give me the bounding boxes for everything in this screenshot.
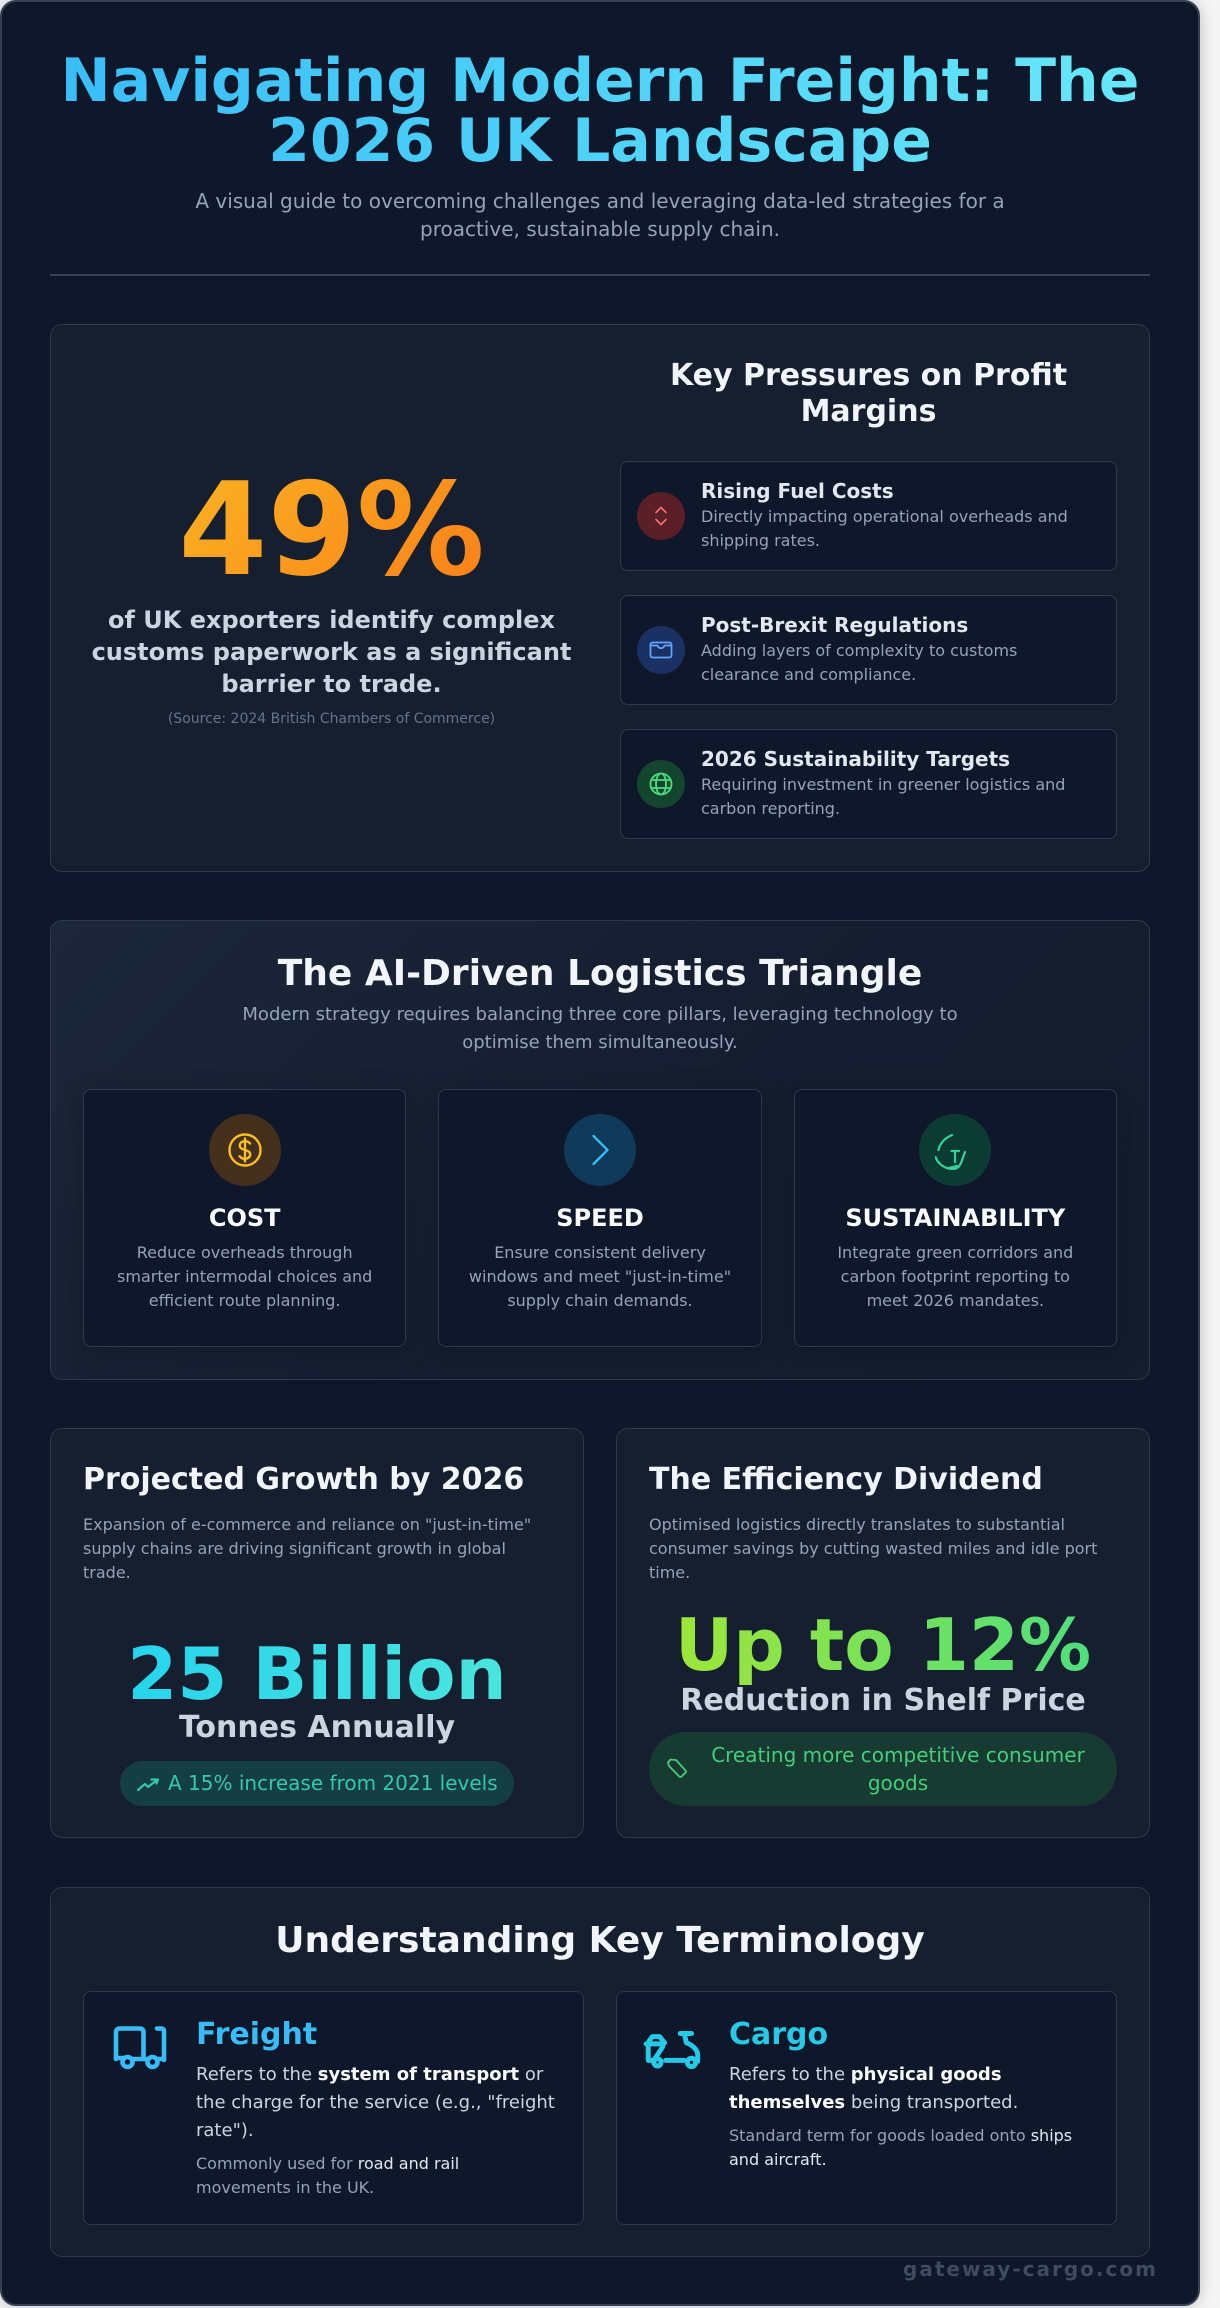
description: efficiency dividend — [649, 1515, 1097, 1582]
text: rising fuel costs — [701, 479, 1068, 550]
big statistic: up to 12%: Up to 12% — [675, 1603, 1091, 1687]
description: speed: supply chain demands. — [507, 1291, 693, 1310]
subtitle: A visual guide to overcoming challenges and leveraging data-led strategies for a — [195, 188, 1005, 212]
logistics triangle intro: Modern strategy requires balancing three core pillars, leveraging technology to — [242, 1004, 958, 1025]
pill text: Creating more competitive consumer — [711, 1742, 1085, 1766]
card: speed — [438, 1089, 762, 1347]
description: efficiency dividend: Optimised logistics directly translates to substantial — [649, 1515, 1065, 1534]
label: cost: COST — [209, 1204, 280, 1232]
statistic description: customs paperwork as a significant — [92, 638, 571, 666]
statistic source: (Source: 2024 British Chambers of Commerce) — [168, 711, 495, 727]
big statistic 49%: 49% — [178, 456, 485, 605]
subtitle — [195, 188, 1005, 240]
definition: cargo — [729, 2064, 1018, 2113]
text: sustainability targets: 2026 Sustainability Targets — [701, 747, 1010, 771]
description: efficiency dividend: consumer savings by cutting wasted miles and idle port — [649, 1539, 1097, 1558]
description: speed — [469, 1243, 731, 1310]
text: sustainability targets — [701, 747, 1065, 818]
icon: price tag — [667, 1758, 687, 1778]
description: cost: Reduce overheads through — [137, 1243, 353, 1262]
big statistic: 25 billion: 25 Billion — [127, 1632, 507, 1716]
text: sustainability targets: Requiring investment in greener logistics and — [701, 774, 1065, 794]
logistics triangle intro: optimise them simultaneously. — [462, 1032, 738, 1053]
description: projected growth: supply chains are driving significant growth in global — [83, 1539, 506, 1558]
heading: key pressures: Key Pressures on Profit — [670, 358, 1067, 392]
icon: fuel chevrons — [637, 492, 685, 540]
statistic unit: Tonnes Annually — [179, 1710, 455, 1745]
text: post-brexit regulations: Post-Brexit Regulations — [701, 613, 968, 637]
callout pill: competitive goods — [649, 1732, 1117, 1806]
definition: cargo: Refers to the physical goods — [729, 2064, 1002, 2085]
heading: logistics triangle: The AI-Driven Logistics Triangle — [278, 953, 922, 994]
label: speed: SPEED — [556, 1204, 644, 1232]
description: sustainability: Integrate green corridors and — [837, 1243, 1073, 1262]
statistic unit: Reduction in Shelf Price — [680, 1682, 1086, 1718]
title — [50, 51, 1150, 171]
text: post-brexit regulations — [701, 613, 1017, 684]
heading: projected growth: Projected Growth by 2026 — [83, 1462, 524, 1497]
description: cost: efficient route planning. — [149, 1291, 341, 1310]
description: sustainability: carbon footprint reporting to — [841, 1267, 1070, 1286]
term: freight: Freight — [196, 2016, 317, 2052]
card: rising fuel costs — [620, 461, 1117, 571]
card: cargo — [616, 1991, 1117, 2225]
description: speed: windows and meet "just-in-time" — [469, 1267, 731, 1286]
icon: dollar coin — [209, 1114, 281, 1186]
usage note: cargo — [729, 2126, 1072, 2169]
card: sustainability — [794, 1089, 1117, 1347]
text: sustainability targets: carbon reporting. — [701, 798, 840, 818]
description: projected growth: Expansion of e-commerce and reliance on "just-in-time" — [83, 1515, 531, 1534]
panel: key terminology — [50, 1887, 1150, 2257]
description: cost: smarter intermodal choices and — [117, 1267, 372, 1286]
definition: freight: Refers to the system of transport or — [196, 2064, 543, 2085]
heading: key pressures — [670, 358, 1067, 428]
callout pill: 15% increase — [120, 1761, 514, 1806]
usage note: freight — [196, 2154, 459, 2197]
pill text: goods — [868, 1770, 928, 1794]
definition: freight: the charge for the service (e.g., "freight — [196, 2092, 555, 2113]
icon: truck — [114, 2026, 166, 2070]
card: cost — [83, 1089, 406, 1347]
logistics triangle intro — [242, 1004, 958, 1053]
heading: key terminology: Understanding Key Terminology — [275, 1920, 925, 1961]
text: rising fuel costs: Rising Fuel Costs — [701, 479, 894, 503]
description: speed: Ensure consistent delivery — [494, 1243, 706, 1262]
pill text — [711, 1742, 1085, 1794]
pill text: A 15% increase from 2021 levels — [168, 1770, 498, 1794]
usage note: cargo: and aircraft. — [729, 2150, 827, 2169]
card: sustainability targets — [620, 729, 1117, 839]
definition: cargo: themselves being transported. — [729, 2092, 1018, 2113]
usage note: cargo: Standard term for goods loaded onto ships — [729, 2126, 1072, 2145]
heading: efficiency dividend: The Efficiency Dividend — [649, 1462, 1043, 1497]
description: projected growth: trade. — [83, 1563, 131, 1582]
card: post-brexit regulations — [620, 595, 1117, 705]
description: projected growth — [83, 1515, 531, 1582]
big statistic 49% — [83, 456, 580, 606]
description: sustainability — [837, 1243, 1073, 1310]
panel: efficiency dividend — [616, 1428, 1150, 1838]
description: efficiency dividend: time. — [649, 1563, 690, 1582]
text: rising fuel costs: Directly impacting operational overheads and — [701, 506, 1068, 526]
icon: customs envelope — [637, 626, 685, 674]
term: cargo: Cargo — [729, 2016, 828, 2052]
text: post-brexit regulations: clearance and compliance. — [701, 664, 916, 684]
text: rising fuel costs: shipping rates. — [701, 530, 820, 550]
icon: eco cycle — [919, 1114, 991, 1186]
icon: globe — [637, 760, 685, 808]
definition: freight: rate"). — [196, 2120, 254, 2141]
statistic description: of UK exporters identify complex — [108, 606, 555, 634]
text: post-brexit regulations: Adding layers of complexity to customs — [701, 640, 1017, 660]
title: Navigating Modern Freight: The — [61, 46, 1139, 116]
subtitle: proactive, sustainable supply chain. — [420, 216, 780, 240]
usage note: freight: Commonly used for road and rail — [196, 2154, 459, 2173]
statistic description: barrier to trade. — [221, 670, 442, 698]
title: 2026 UK Landscape — [268, 106, 932, 176]
usage note: freight: movements in the UK. — [196, 2178, 374, 2197]
panel: AI-driven logistics triangle — [50, 920, 1150, 1380]
description: cost — [117, 1243, 372, 1310]
icon: trending up — [136, 1778, 160, 1792]
card: freight — [83, 1991, 584, 2225]
statistic description — [92, 606, 571, 698]
icon: chevron — [564, 1114, 636, 1186]
watermark: gateway-cargo.com — [903, 2256, 1158, 2280]
definition: freight — [196, 2064, 555, 2141]
icon: cargo scooter — [644, 2031, 700, 2069]
panel: 49% statistic and key pressures — [50, 324, 1150, 872]
label: sustainability: SUSTAINABILITY — [845, 1204, 1065, 1232]
description: sustainability: meet 2026 mandates. — [867, 1291, 1044, 1310]
panel: projected growth — [50, 1428, 584, 1838]
heading: key pressures: Margins — [801, 394, 936, 428]
